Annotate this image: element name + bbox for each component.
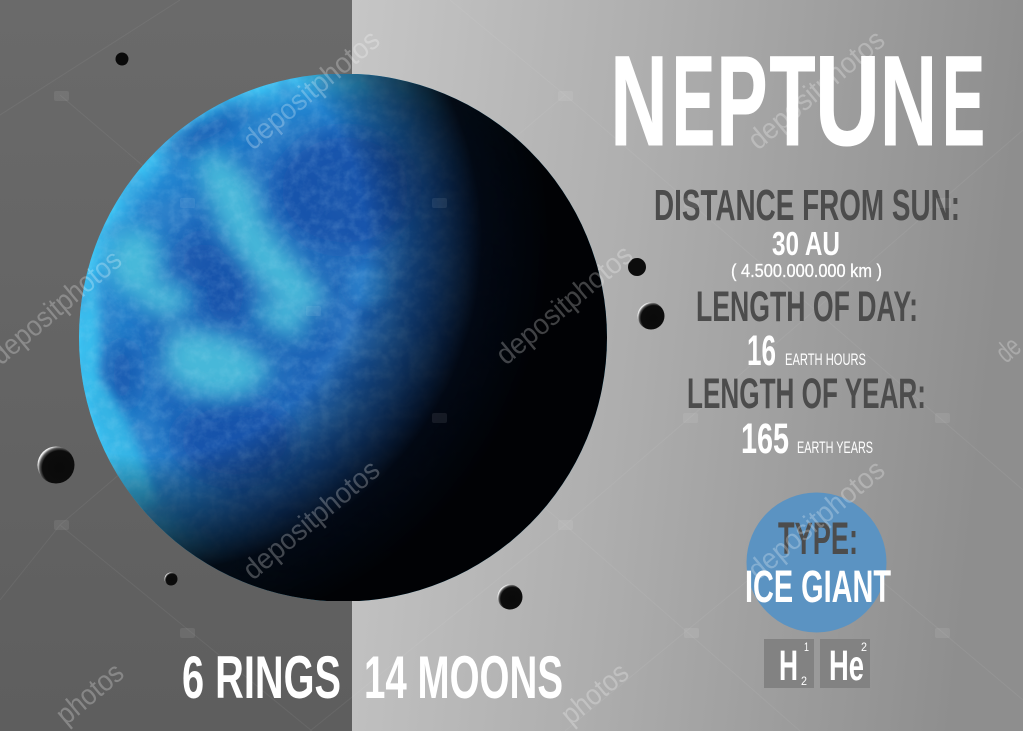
value: kilometres: ( 4.500.000.000 km ) xyxy=(731,261,882,281)
unit: earth hours: EARTH HOURS xyxy=(785,350,866,369)
moon top left xyxy=(116,52,128,66)
moons count: 14 MOONS xyxy=(364,644,563,711)
watermarks: depositphotos xyxy=(237,24,386,156)
element tile: helium xyxy=(820,639,870,690)
value: 16: 16 xyxy=(747,327,776,375)
title: N xyxy=(880,30,937,173)
value: 165: 165 xyxy=(741,415,789,463)
badge circle xyxy=(746,492,886,632)
watermarks: depositphotos xyxy=(237,454,386,586)
title xyxy=(610,30,985,173)
background: right light panel xyxy=(352,0,1023,731)
value: 30 AU: 30 AU xyxy=(772,225,840,262)
watermarks: depositphotos xyxy=(742,454,891,586)
label: type: TYPE: xyxy=(778,513,858,564)
watermarks: depositphotos xyxy=(490,239,639,371)
moon lower left xyxy=(164,572,178,586)
title: N xyxy=(610,30,668,173)
title: E xyxy=(672,30,715,173)
title: T xyxy=(770,30,816,173)
unit: earth years: EARTH YEARS xyxy=(797,438,873,457)
element tile: hydrogen xyxy=(764,639,814,690)
stats text block xyxy=(654,181,960,463)
title: U xyxy=(815,30,880,173)
element tile: helium: 2 xyxy=(861,640,867,654)
type badge xyxy=(745,492,891,632)
element tile: hydrogen: 1 xyxy=(804,640,809,654)
watermarks: photos xyxy=(50,657,130,731)
watermarks: depositphotos xyxy=(742,24,891,156)
watermarks: photos xyxy=(555,657,635,731)
moon right large xyxy=(638,302,664,330)
label: ice giant: ICE GIANT xyxy=(745,561,891,612)
title: P xyxy=(716,30,768,173)
element tile: helium: He xyxy=(829,642,864,690)
background: left dark panel xyxy=(0,0,352,731)
moon right small xyxy=(628,258,646,276)
planet Neptune xyxy=(79,62,607,601)
element tile: hydrogen: 2 xyxy=(801,674,807,688)
element tile: hydrogen: H xyxy=(779,642,798,690)
moon bottom xyxy=(498,584,522,610)
moon left large xyxy=(38,446,74,484)
rings count: 6 RINGS xyxy=(182,644,341,711)
